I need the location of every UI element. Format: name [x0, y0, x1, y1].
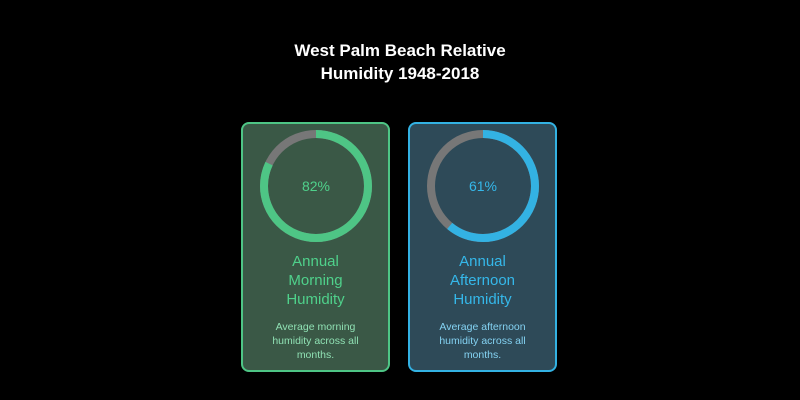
- label: afternoon: Humidity: [453, 291, 512, 308]
- title: Humidity 1948-2018: [321, 64, 479, 83]
- chart: morning donut: 82%: [302, 178, 330, 194]
- label: morning: Humidity: [286, 291, 345, 308]
- chart: afternoon donut: 61%: [469, 178, 497, 194]
- chart: afternoon donut: [427, 130, 539, 242]
- label: afternoon: Afternoon: [450, 272, 515, 289]
- label: morning: Annual: [292, 253, 339, 270]
- title: [294, 41, 506, 83]
- panel: afternoon: [408, 122, 557, 372]
- text: afternoon description: Average afternoon humidity across all months.: [439, 321, 526, 361]
- label: afternoon: Annual: [459, 253, 506, 270]
- title: West Palm Beach Relative: [294, 41, 506, 60]
- label: morning: [286, 253, 345, 308]
- chart: morning donut: [260, 130, 372, 242]
- panel: morning: [241, 122, 390, 372]
- label: morning: Morning: [288, 272, 343, 289]
- label: afternoon: [450, 253, 515, 308]
- text: morning description: Average morning humidity across all months.: [272, 321, 359, 361]
